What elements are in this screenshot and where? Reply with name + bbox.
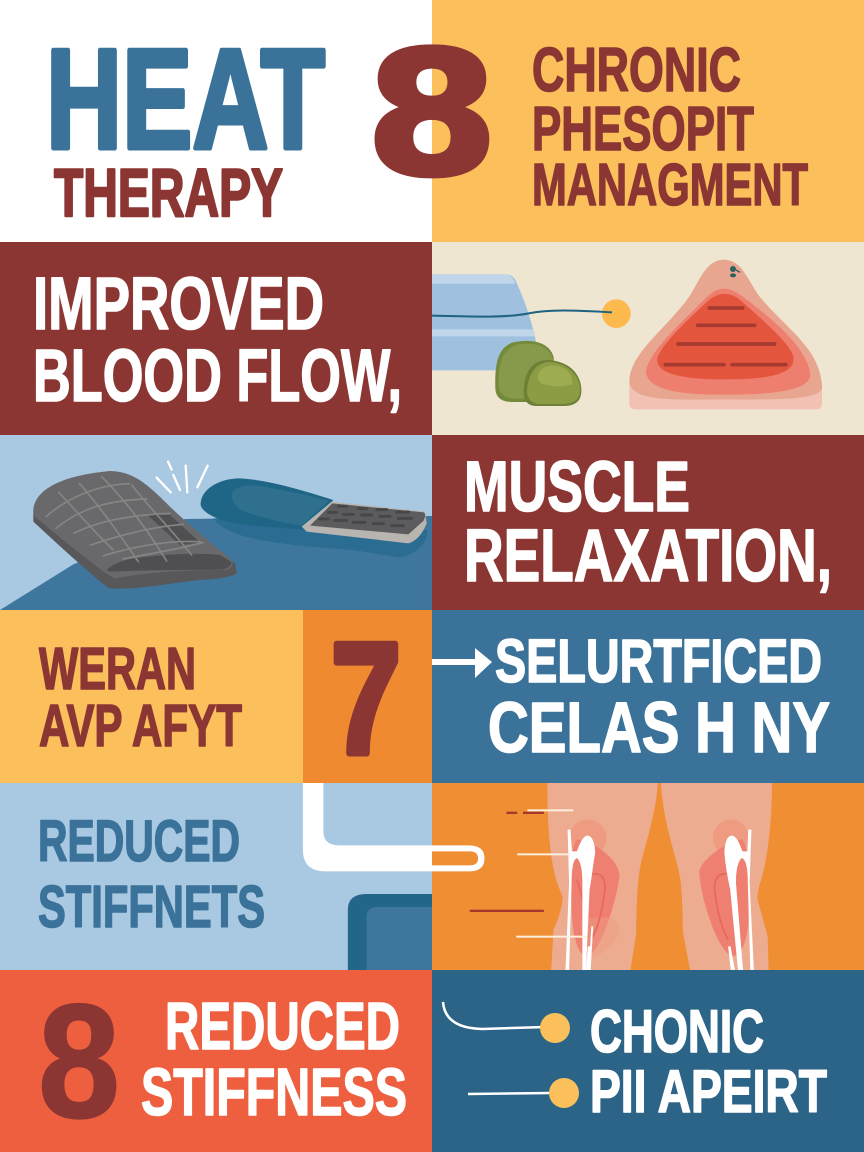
large number 8: 8 xyxy=(365,14,499,215)
text: chronic: CHRONIC xyxy=(532,36,741,105)
callout lines xyxy=(470,809,587,938)
text: weran: WERAN xyxy=(39,636,196,702)
panel: title xyxy=(0,0,432,242)
pad control knob xyxy=(730,266,740,277)
panel: knees illustration xyxy=(432,783,864,971)
icon: grey heating pad xyxy=(33,471,237,589)
icon: green stones xyxy=(495,341,581,406)
tendons xyxy=(565,830,595,971)
panel: selurtficed xyxy=(432,610,864,783)
arrow xyxy=(432,648,492,678)
icon: cord with yellow dot xyxy=(432,299,631,328)
icon: blue gel pack xyxy=(432,274,536,370)
panel: reduced stiffnets xyxy=(0,783,432,970)
text: reduced: REDUCED xyxy=(165,989,400,1064)
large number 7: 7 xyxy=(331,611,401,787)
pad heating lines xyxy=(665,308,786,365)
heading: heat: HEAT xyxy=(46,20,325,179)
icon: right leg xyxy=(661,783,772,971)
text: chonic: CHONIC xyxy=(590,998,764,1065)
icon: heating pad xyxy=(629,260,822,409)
text: blood flow: BLOOD FLOW, xyxy=(33,334,402,417)
panel: weran avpafyt xyxy=(0,610,303,783)
connector: top xyxy=(443,1002,570,1043)
pad grid lines xyxy=(46,477,203,562)
hot pack keypad xyxy=(302,502,427,543)
icon: heat sparks xyxy=(157,462,208,492)
heading: therapy: THERAPY xyxy=(54,155,283,231)
text: reduced: REDUCED xyxy=(38,809,240,874)
panel: reduced stiffness xyxy=(0,970,432,1152)
text: stiffness: STIFFNESS xyxy=(141,1055,407,1130)
panel: improved blood flow xyxy=(0,242,432,435)
large number 8: 8 xyxy=(38,971,120,1152)
text: phesopit: PHESOPIT xyxy=(532,95,754,164)
text: muscle: MUSCLE xyxy=(464,448,690,527)
panel: heat packs illustration xyxy=(432,242,864,435)
panel: muscle relaxation xyxy=(432,435,864,610)
hot pack shadow xyxy=(213,518,427,558)
icon: left leg xyxy=(547,783,658,971)
panel: heating pad and hot pack illustration xyxy=(0,435,432,610)
icon: blue hot pack xyxy=(201,478,427,543)
text: aveafyt: AVP AFYT xyxy=(39,693,242,759)
icon: white pipe and blue box xyxy=(303,783,485,971)
text: improved: IMPROVED xyxy=(33,262,324,345)
panel: chronic management xyxy=(432,0,864,242)
table surface xyxy=(0,516,432,610)
tendons xyxy=(724,830,754,971)
text: stiffnets: STIFFNETS xyxy=(38,874,265,940)
connector: bottom xyxy=(468,1078,579,1108)
panel: chonic pii apeirt xyxy=(432,970,864,1152)
panel: number 7 xyxy=(303,610,432,787)
